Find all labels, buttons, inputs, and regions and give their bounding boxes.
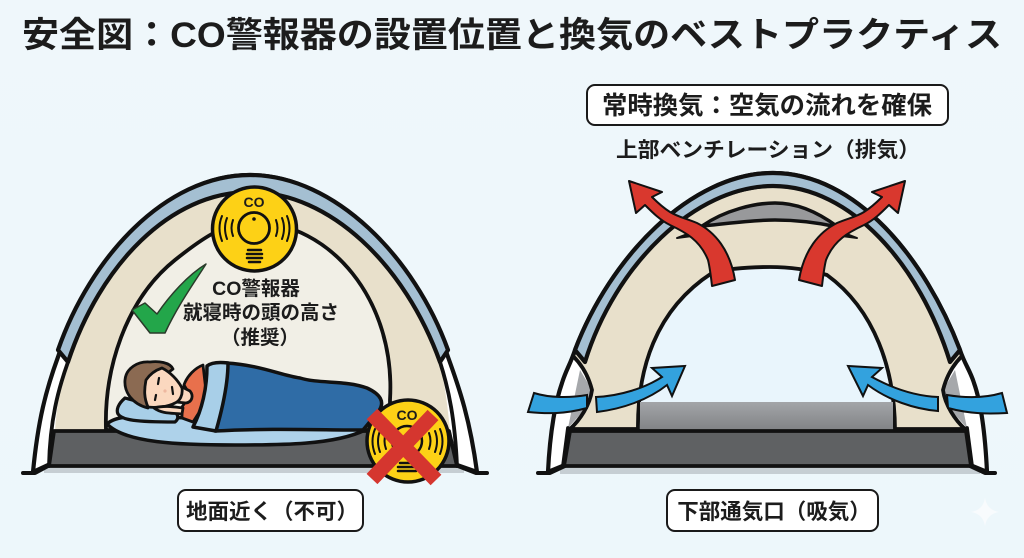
label: near ground: 地面近く（不可）	[186, 500, 358, 524]
person head	[125, 362, 192, 414]
side vent shading	[568, 370, 967, 428]
floor	[564, 431, 971, 466]
pillow	[117, 398, 178, 422]
title: 安全図：CO警報器の設置位置と換気のベストプラクティス	[22, 16, 1002, 55]
fly band	[575, 173, 960, 362]
interior opening	[638, 267, 895, 431]
arm	[154, 406, 183, 414]
bag cuff	[193, 362, 228, 431]
tent shell	[33, 175, 477, 472]
label: lower vent	[667, 490, 878, 531]
hair	[125, 362, 173, 408]
icon: check mark	[132, 264, 206, 333]
neck	[176, 386, 192, 403]
sleeping bag	[215, 363, 382, 431]
label: lower vent: 下部通気口（吸気）	[677, 500, 871, 524]
inner pole line	[49, 362, 457, 466]
cross	[372, 414, 436, 480]
inner mesh	[106, 222, 390, 430]
eyes and mouth	[155, 378, 173, 400]
icon: CO alarm not allowed	[367, 400, 449, 482]
panel: right tent	[538, 173, 995, 474]
tent body	[570, 186, 965, 429]
lower pole lines	[563, 428, 972, 466]
arrow: exhaust right	[799, 181, 905, 286]
ground shadow	[44, 465, 464, 473]
pole feet	[538, 466, 995, 473]
face	[145, 368, 182, 407]
sparkle	[971, 498, 999, 526]
label: constant ventilation	[587, 85, 948, 125]
pole feet	[23, 466, 487, 473]
sleeping pad	[107, 416, 365, 445]
ground shadow	[560, 465, 980, 474]
shirt	[182, 365, 207, 422]
arrow: intake left outer	[528, 393, 587, 413]
rear floor	[640, 402, 893, 430]
icon: CO alarm not allowed: CO	[396, 407, 418, 423]
arrow: exhaust left	[629, 181, 735, 286]
text: recommended height: CO警報器	[212, 278, 300, 300]
text: recommended height	[183, 278, 339, 349]
arrow: intake right inner	[848, 366, 938, 411]
label: constant ventilation: 常時換気：空気の流れを確保	[602, 92, 932, 120]
vent dashes	[677, 231, 857, 238]
top vent	[702, 203, 838, 227]
label: upper vent: 上部ベンチレーション（排気）	[616, 139, 920, 162]
tent shell	[548, 173, 987, 472]
tent body	[55, 192, 450, 430]
floor	[49, 431, 457, 466]
panel: left tent	[23, 175, 487, 482]
text: recommended height: （推奨）	[221, 327, 299, 349]
arrow: intake right outer	[947, 393, 1007, 413]
label: near ground	[178, 490, 363, 531]
fly band	[58, 175, 448, 362]
icon: CO alarm recommended: CO	[244, 194, 265, 210]
text: recommended height: 就寝時の頭の高さ	[183, 301, 339, 324]
arrow: intake left inner	[596, 366, 685, 412]
icon: CO alarm recommended	[212, 187, 296, 271]
